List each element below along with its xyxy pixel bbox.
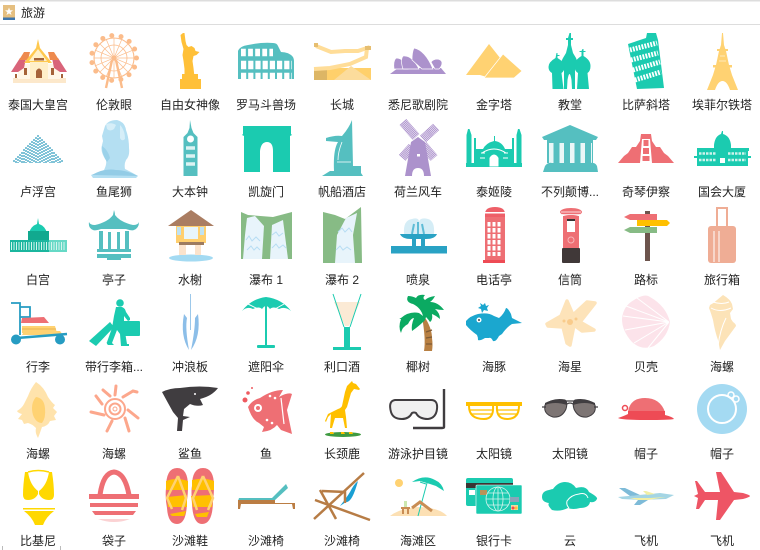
icon: starfish [547, 301, 595, 345]
text: 海螺 [26, 446, 50, 461]
icon: scallop shell [622, 296, 670, 348]
text: 罗马斗兽场 [236, 98, 296, 112]
icon: clouds [542, 482, 597, 511]
icon: bikini [23, 470, 55, 525]
icon: deck chair [314, 473, 370, 520]
icon: dolphin [466, 303, 522, 341]
icon: swimming goggles [390, 389, 444, 428]
text: 悉尼歌剧院 [388, 97, 448, 112]
icon: sun shell [91, 386, 138, 431]
text: 云 [564, 534, 576, 548]
icon: Colosseum [238, 43, 294, 79]
icon: post box [560, 208, 582, 263]
icon: Sydney Opera House [390, 48, 446, 74]
icon: British Museum [542, 125, 598, 172]
text: 帆船酒店 [318, 184, 366, 199]
icon: Capitol building [694, 131, 751, 166]
icon: conch shell [709, 295, 736, 350]
text: 旅行箱 [704, 272, 740, 287]
text: 不列颠博... [541, 184, 599, 199]
text: 袋子 [102, 534, 126, 548]
icon: Chichen Itza [618, 134, 674, 163]
text: 鱼尾狮 [96, 185, 132, 199]
icon: water pavilion [168, 210, 214, 262]
icon: pavilion [89, 210, 139, 260]
icon: beach umbrella [242, 297, 291, 348]
text: 带行李箱... [85, 359, 143, 374]
text: 银行卡 [476, 534, 512, 548]
text: 亭子 [102, 272, 126, 287]
icon: red airplane [694, 472, 750, 520]
icon: Taj Mahal [466, 129, 522, 167]
text: 飞机 [634, 534, 658, 548]
icon: giraffe [325, 381, 361, 437]
icon: fish [242, 387, 292, 434]
icon: palm tree [400, 295, 444, 351]
text: 泰国大皇宫 [8, 97, 68, 112]
text: 埃菲尔铁塔 [692, 97, 752, 112]
text: 海螺 [102, 446, 126, 461]
header: panel title: 旅游 [21, 6, 45, 20]
icon: airliner [618, 488, 674, 505]
icon: signpost [624, 211, 670, 261]
icon: Arc de Triomphe [242, 126, 292, 172]
icon: blue sun hat [697, 384, 747, 434]
icon: cocktail glass [333, 294, 361, 350]
icon: waterfall 1 [241, 212, 292, 259]
icon: beach scene [390, 477, 447, 516]
text: 比萨斜塔 [622, 98, 670, 112]
text: 荷兰风车 [394, 184, 442, 199]
icon: Dutch windmill [402, 122, 436, 176]
icon: Great Wall [314, 43, 371, 80]
text: 贝壳 [634, 360, 658, 374]
text: 利口酒 [324, 360, 360, 374]
text: 瀑布 2 [325, 273, 359, 287]
text: 伦敦眼 [96, 97, 132, 112]
icon: Merlion [91, 120, 138, 178]
text: 瀑布 1 [249, 273, 283, 287]
icon: pyramids [466, 44, 522, 78]
icon: spiky conch shell [17, 382, 57, 438]
icon: fountain [391, 218, 447, 254]
text: 帽子 [710, 446, 734, 461]
icon: sun lounger [238, 484, 295, 509]
icon: suitcase [708, 208, 736, 263]
text: 鱼 [260, 447, 272, 461]
icon: London Eye [92, 36, 136, 88]
text: 信筒 [558, 272, 582, 287]
header: panel title [3, 5, 45, 20]
icon: Statue of Liberty [180, 33, 201, 89]
text: 太阳镜 [476, 446, 512, 461]
text: 海豚 [482, 359, 506, 374]
icon: telephone booth [483, 207, 505, 263]
text: 冲浪板 [172, 359, 208, 374]
icon: Leaning Tower of Pisa [628, 33, 664, 89]
icon: waterfall 2 [323, 207, 362, 263]
icon: shark [162, 386, 218, 431]
icon: Big Ben [184, 120, 198, 176]
text: 凯旋门 [248, 184, 284, 199]
text: 比基尼 [20, 534, 56, 548]
icon: flip flops [166, 468, 214, 524]
text: 长颈鹿 [324, 446, 360, 461]
icon: Thai grand palace [11, 39, 67, 83]
text: 帽子 [634, 446, 658, 461]
text: 金字塔 [476, 97, 512, 112]
text: 自由女神像 [160, 97, 220, 112]
text: 白宫 [26, 272, 50, 287]
icon: Burj Al Arab [322, 120, 363, 176]
text: 太阳镜 [552, 446, 588, 461]
text: 卢浮宫 [20, 184, 56, 199]
text: 水榭 [178, 272, 202, 287]
icon: striped bag [89, 472, 139, 522]
text: 海星 [558, 359, 582, 374]
text: 沙滩椅 [248, 534, 284, 548]
text: 游泳护目镜 [388, 446, 448, 461]
icon: church [548, 33, 590, 89]
text: 沙滩椅 [324, 534, 360, 548]
text: 椰树 [406, 359, 430, 374]
text: 大本钟 [172, 184, 208, 199]
text: 电话亭 [476, 272, 512, 287]
text: 沙滩鞋 [172, 533, 208, 548]
icon: shutter sunglasses [466, 404, 522, 419]
icon: Louvre pyramid [14, 135, 62, 163]
icon: White House [10, 218, 67, 252]
icon: luggage cart [11, 303, 67, 344]
text: 鲨鱼 [178, 447, 202, 461]
icon: aviator sunglasses [542, 400, 598, 417]
text: 飞机 [710, 534, 734, 548]
text: 海滩区 [400, 533, 436, 548]
icon: traveller with luggage [89, 299, 140, 346]
text: 奇琴伊察 [622, 185, 670, 199]
text: 路标 [634, 272, 658, 287]
text: 教堂 [558, 97, 582, 112]
icon: bank cards [466, 478, 522, 514]
icon: Eiffel Tower [707, 33, 738, 90]
icon: red hat [618, 398, 674, 420]
text: 泰姬陵 [476, 185, 512, 199]
text: 行李 [26, 359, 50, 374]
text: 长城 [330, 98, 354, 112]
text: 遮阳伞 [248, 359, 284, 374]
text: 国会大厦 [698, 185, 746, 199]
text: 海螺 [710, 359, 734, 374]
text: 喷泉 [406, 273, 430, 287]
icon: surfboard [183, 294, 199, 350]
